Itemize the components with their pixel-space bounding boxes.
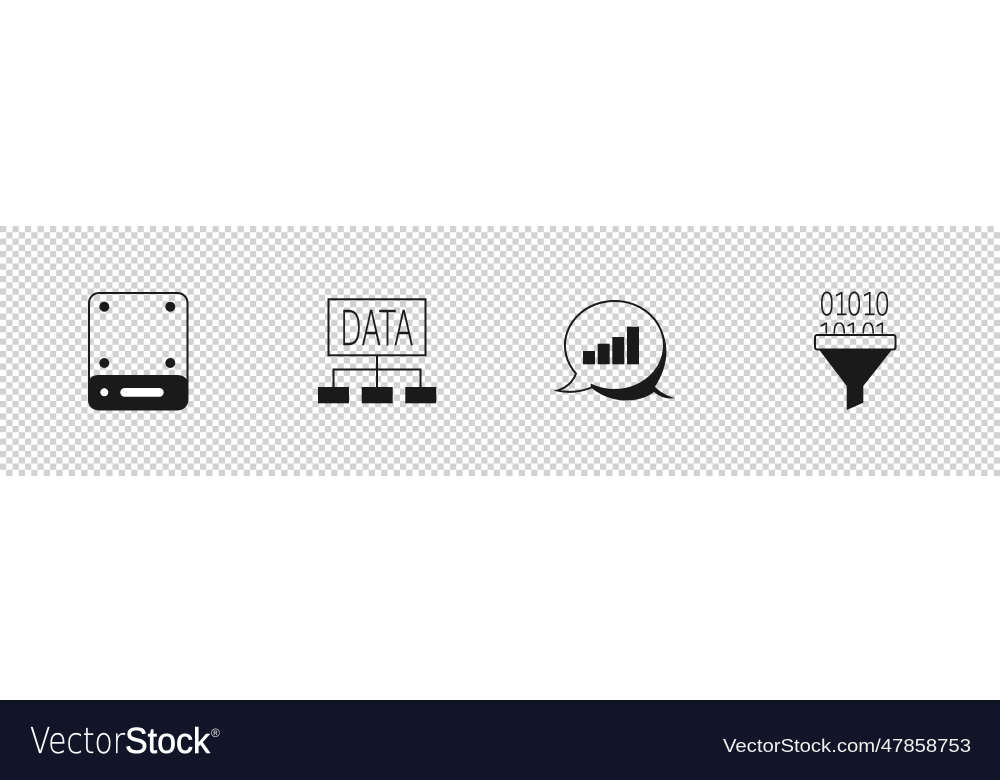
- footer logo: VectorStock: Stock: [125, 720, 211, 761]
- transparency checkerboard band: [0, 226, 1000, 476]
- icon: binary data funnel: 01010: [819, 286, 890, 323]
- footer bar: [0, 700, 1000, 780]
- footer logo: VectorStock: ®: [211, 726, 220, 740]
- icon: hard drive: [88, 293, 188, 410]
- icon: binary data funnel: [815, 286, 896, 410]
- icon: binary data funnel: 10101: [818, 317, 890, 353]
- footer image id: VectorStock.com/47858753: [723, 735, 971, 756]
- icon: speech bubbles with bar chart: [558, 301, 675, 401]
- icon: data hierarchy: [318, 299, 436, 403]
- footer logo: VectorStock: [30, 720, 220, 762]
- data label: DATA: [340, 301, 413, 357]
- footer logo: VectorStock: Vector: [30, 721, 125, 762]
